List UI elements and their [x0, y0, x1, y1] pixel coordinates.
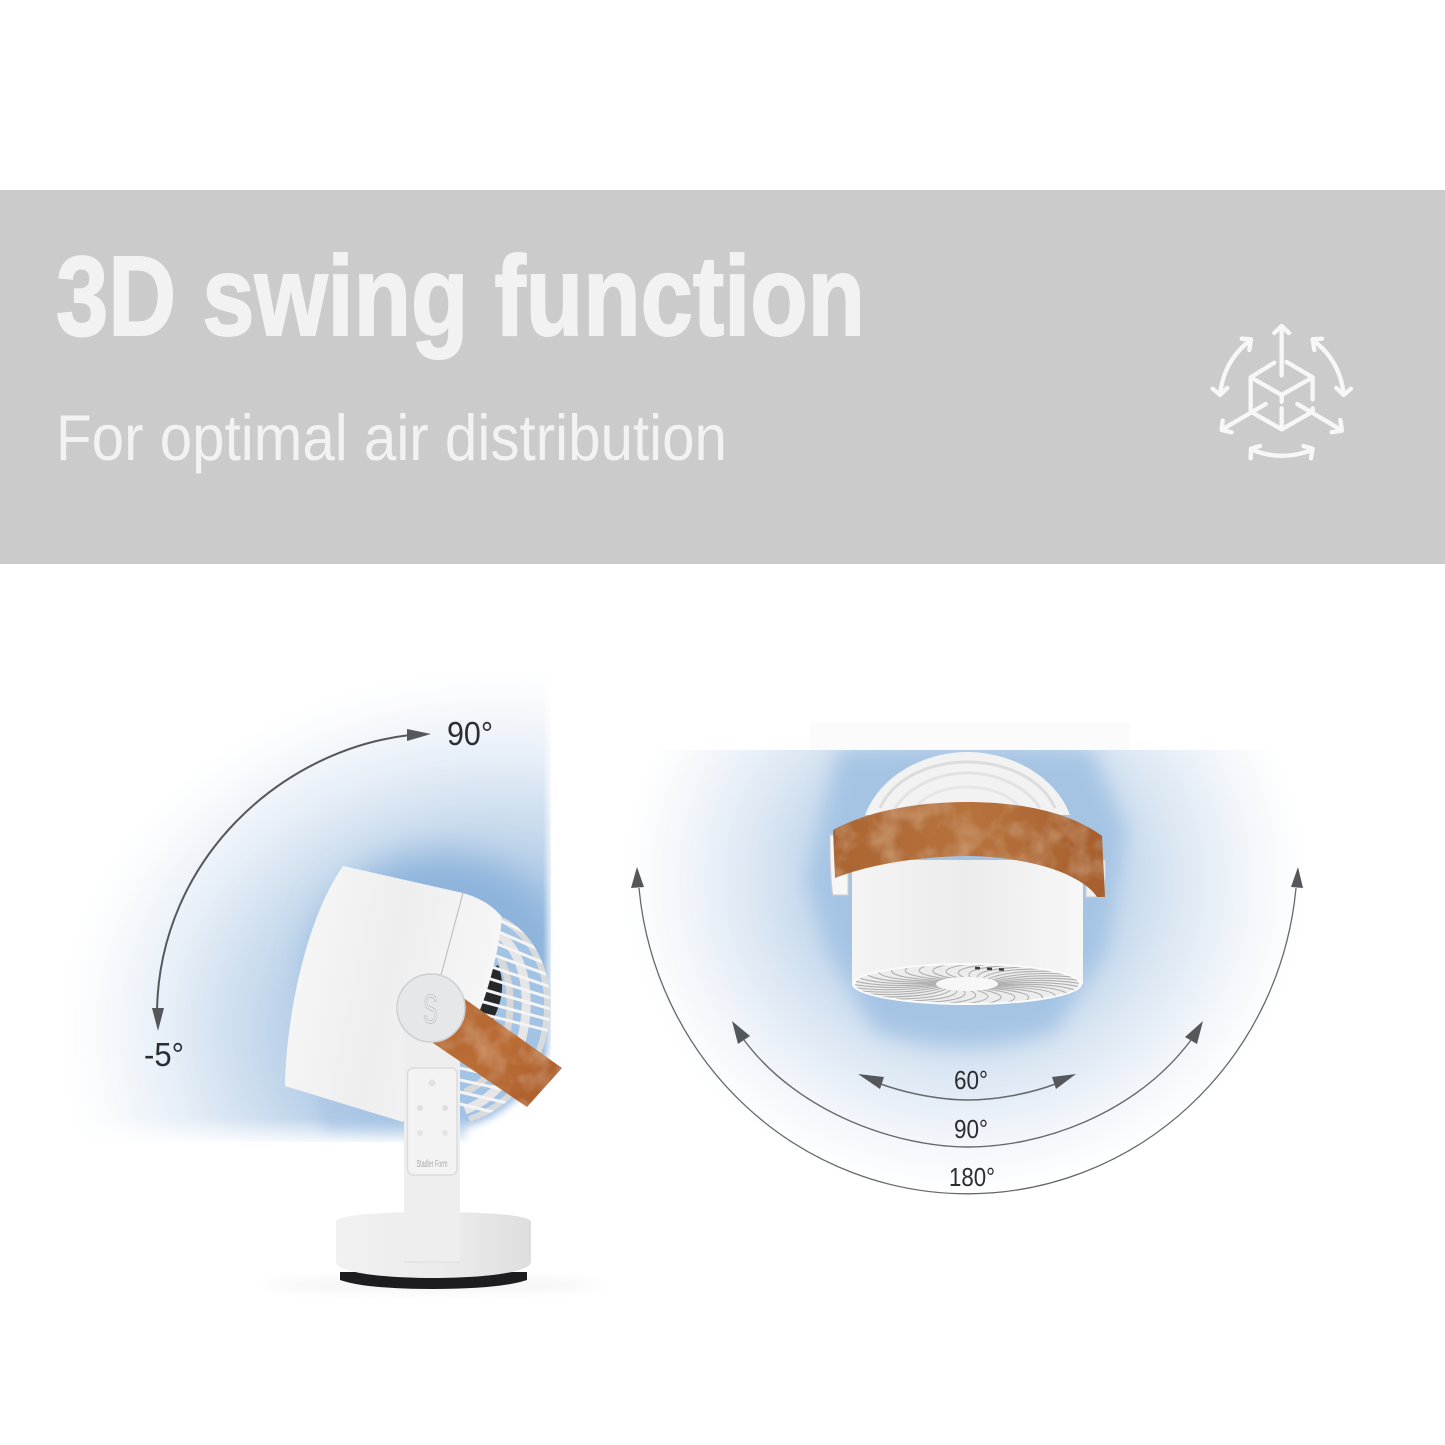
label: -5 degrees: -5° — [144, 1036, 184, 1073]
left blue air glow — [104, 705, 551, 1142]
label: 180 degrees: 180° — [949, 1162, 995, 1192]
label: 90 degrees: 90° — [447, 715, 493, 752]
cylinder body — [852, 860, 1083, 984]
fan top view — [830, 752, 1105, 1005]
leather strap — [833, 802, 1105, 897]
sweep arc: 90 degrees — [732, 1021, 1203, 1147]
left swing arc with arrows — [152, 729, 431, 1031]
housing — [285, 866, 502, 1122]
side brackets — [830, 835, 848, 895]
label: 90 degrees sweep: 90° — [954, 1114, 988, 1144]
leather strap — [433, 997, 562, 1107]
title: 3D swing function — [56, 233, 865, 359]
label: 60 degrees: 60° — [954, 1065, 988, 1095]
banner background — [0, 190, 1445, 564]
pivot disc with logo — [397, 974, 465, 1042]
sweep arc: 60 degrees — [858, 1074, 1076, 1100]
subtitle: For optimal air distribution — [56, 401, 727, 474]
base — [336, 1212, 531, 1289]
right blue air glow — [620, 700, 1320, 1200]
pivot disc with logo: S — [423, 986, 438, 1032]
fan grill — [460, 917, 550, 1122]
remote control — [408, 1068, 457, 1175]
front vent — [850, 963, 1084, 1005]
stem — [404, 1025, 460, 1262]
rear grill dome — [865, 752, 1070, 815]
remote control: Stadler Form — [416, 1159, 448, 1170]
icon: 3D swing cube with arrows — [1213, 326, 1351, 458]
floor shadow — [263, 1280, 603, 1290]
sweep arc: 180 degrees — [631, 867, 1303, 1194]
housing shadow wedge — [315, 1090, 405, 1130]
fan side view — [285, 866, 562, 1289]
